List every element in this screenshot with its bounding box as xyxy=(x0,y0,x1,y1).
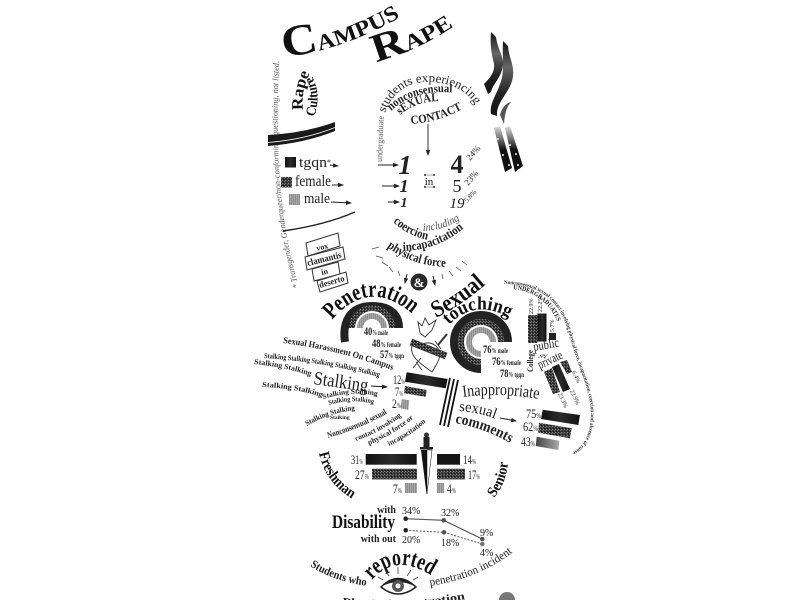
chart: senior bars xyxy=(437,452,480,496)
caption: students who reported penetration incident: reported xyxy=(364,553,438,580)
heading: students experiencing nonconsensual sexual contact: sEXUAL xyxy=(397,93,438,115)
chart: sexual touching rings xyxy=(454,315,508,369)
line chart: disability comparison: 18% xyxy=(441,538,459,549)
chart: stalking bars xyxy=(392,372,448,411)
caption: nonconsensual sexual contact involving physical force or incapacitation xyxy=(326,408,426,446)
chart: college public bars: 22.9% xyxy=(529,298,535,314)
heading: Rape Culture: Culture xyxy=(306,76,318,116)
heading: students experiencing nonconsensual sexual contact: CONTACT xyxy=(411,102,461,124)
banner: vox clamantis in deserto: clamantis xyxy=(306,251,343,269)
title: Campus Rape: RAPE xyxy=(368,16,452,62)
icon: flag streamer xyxy=(484,32,523,172)
heading: Sexual Harassment On Campus: Sexual Harassment On Campus xyxy=(284,337,394,370)
line chart: disability comparison: 34% xyxy=(402,506,420,517)
chart: college private bars: 6.4% xyxy=(570,370,581,384)
chart: college private bars: 22.9% xyxy=(568,389,580,406)
caption: nonconsensual sexual contact involving physical force or incapacitation: Nonconsensual sexual xyxy=(326,408,387,438)
list: coercion, incapacitation, physical force: incapacitation xyxy=(403,224,464,252)
heading: with Disability with out: with out xyxy=(361,534,397,545)
word cloud: Stalking: Stalking Stalking xyxy=(262,382,323,398)
chart: college public bars: 22.2% xyxy=(538,296,544,312)
heading: students experiencing nonconsensual sexual contact xyxy=(380,76,480,124)
banner: vox clamantis in deserto: deserto xyxy=(318,273,346,290)
icon: dagger xyxy=(420,432,433,494)
heading: Inappropriate sexual comments: sexual xyxy=(460,404,498,418)
ratios: 1 in 4, 1 in 5, 1 in 19: 19 xyxy=(450,196,465,212)
heading: Rape Culture: Rape xyxy=(292,71,310,110)
caption: nonconsensual sexual contact involving physical force or incapacitation: contact involving xyxy=(355,413,402,440)
chart: stalking bars: 2% xyxy=(392,396,401,411)
icon: winged heart and sword xyxy=(411,318,447,372)
heading: Inappropriate sexual comments: Inappropriate xyxy=(462,385,540,400)
icon: cut-off grey circle xyxy=(499,592,515,600)
ratios: 1 in 4, 1 in 5, 1 in 19: 24% xyxy=(464,143,483,162)
chart: comments bars xyxy=(521,406,580,450)
chart: freshman bars: 27% xyxy=(355,467,369,482)
stats: sexual touching percentages: 78% tgqn xyxy=(500,366,524,380)
title: Campus Rape xyxy=(284,6,452,62)
legend: respondent groups xyxy=(281,155,351,207)
title: Campus Rape: CAMPUS xyxy=(284,6,398,55)
list: coercion, incapacitation, physical force: physical force xyxy=(386,242,446,267)
caption: students who reported penetration incident: penetration incident xyxy=(430,548,512,588)
line chart: disability comparison: 4% xyxy=(480,548,493,559)
heading: Inappropriate sexual comments: comments xyxy=(456,416,513,442)
legend: respondent groups: * xyxy=(327,158,331,167)
ratios: 1 in 4, 1 in 5, 1 in 19: 1 xyxy=(400,176,408,196)
heading: Sexual touching: Sexual xyxy=(431,272,486,317)
chart: freshman bars xyxy=(351,452,417,496)
chart: college private bars: 23.3% xyxy=(556,392,568,409)
word cloud: Stalking: Stalking Stalking Stalking Stalking Stalking xyxy=(264,353,380,378)
line chart: disability comparison: 32% xyxy=(441,508,459,519)
chart: senior bars: 17% xyxy=(468,467,480,482)
heading: Inappropriate sexual comments xyxy=(456,385,540,442)
word cloud: Stalking: Stalking xyxy=(312,368,370,397)
stats: penetration percentages: 57% tgqn xyxy=(380,347,404,361)
label: College public vs private: private xyxy=(535,347,565,372)
chart: comments bars: 75% xyxy=(526,406,541,421)
triple divider xyxy=(440,378,458,427)
stats: sexual touching percentages xyxy=(483,342,524,380)
label: College public vs private: College xyxy=(525,350,535,372)
chart: comments bars: 62% xyxy=(523,419,538,434)
text arc: nonconsensual definition: Nonconsensual sexual contact involving physical force, incapacitation, coercion and absence of consent xyxy=(504,280,594,454)
word cloud: Stalking xyxy=(254,353,380,426)
heading: with Disability with out xyxy=(332,505,397,545)
legend: respondent groups: female xyxy=(295,173,331,190)
heading: with Disability with out: Disability xyxy=(332,513,396,533)
caption: nonconsensual sexual contact involving physical force or incapacitation: physical force or xyxy=(368,416,413,446)
chart: stalking bars: 12% xyxy=(393,372,405,387)
icon: ampersand badge xyxy=(410,274,428,290)
caption: nonconsensual sexual contact involving physical force or incapacitation: incapacitation xyxy=(387,420,426,446)
list: coercion, incapacitation, physical force xyxy=(386,216,464,267)
word cloud: Stalking: Stalking xyxy=(330,415,350,421)
list: coercion, incapacitation, physical force: including xyxy=(423,216,460,231)
label: undergraduate: undergraduate xyxy=(374,116,386,162)
caption: students who reported penetration incident: Students who xyxy=(310,560,366,586)
arrow: comments to bars xyxy=(500,418,516,421)
chart: freshman bars: 31% xyxy=(351,452,363,467)
chart: penetration rainbow arcs xyxy=(344,306,399,342)
stats: penetration percentages: 48% female xyxy=(372,336,401,350)
label: College public vs private: -vs- xyxy=(537,350,550,361)
stats: penetration percentages: 40% male xyxy=(364,324,388,338)
line chart: disability comparison: 20% xyxy=(402,535,420,546)
footnote: gender definitions along left side: * Transgender, Genderqueer/non-conforming, questioning, not listed. xyxy=(272,62,297,288)
ratios: 1 in 4, 1 in 5, 1 in 19: 4 xyxy=(450,150,464,179)
legend: respondent groups: tgqn xyxy=(299,155,328,171)
banner: vox clamantis in deserto: vox xyxy=(315,241,329,253)
stats: penetration percentages xyxy=(364,324,404,361)
ratios: 1 in 4, 1 in 5, 1 in 19: 1 xyxy=(400,196,408,211)
heading: students experiencing nonconsensual sexual contact: nonconsensual xyxy=(388,84,452,111)
word cloud: Stalking: Stalking Stalking xyxy=(328,396,374,405)
chart: comments bars: 43% xyxy=(521,434,535,449)
line chart: disability comparison xyxy=(402,506,493,559)
sunburst rays xyxy=(372,247,467,279)
label: College public vs private: public xyxy=(532,335,560,354)
heading: Sexual touching: touching xyxy=(444,296,513,324)
lower curved rule xyxy=(283,212,355,231)
chart: senior bars: 14% xyxy=(463,452,476,467)
label: undergraduates: UNDERGRADUATES xyxy=(514,284,561,321)
chart: college public bars: 5.7% xyxy=(550,320,556,332)
heading: Penetration: Penetration xyxy=(320,284,418,320)
heading: with Disability with out: with xyxy=(377,505,396,516)
arrows pointing to categories xyxy=(405,274,435,285)
label: College public vs private xyxy=(525,335,565,372)
chart: senior bars: 4% xyxy=(447,481,456,496)
caption: students who reported penetration incident xyxy=(310,548,512,588)
ratios: 1 in 4, 1 in 5, 1 in 19: 5 xyxy=(452,176,462,196)
chart: college public bars xyxy=(528,296,556,343)
stats: sexual touching percentages: 76% female xyxy=(492,354,521,368)
icon: ampersand badge: & xyxy=(414,275,425,290)
list: coercion, incapacitation, physical force: coercion xyxy=(394,218,428,240)
heading: Senior: Senior xyxy=(488,462,508,498)
banner: vox clamantis in deserto: in xyxy=(320,266,329,277)
arrow: down to ratios xyxy=(427,124,429,155)
ratios: 1 in 4, 1 in 5, 1 in 19: in xyxy=(425,176,434,188)
heading: Rape Culture xyxy=(292,71,318,116)
heading: Freshman: Freshman xyxy=(319,450,354,498)
ratios: 1 in 4, 1 in 5, 1 in 19 xyxy=(378,143,483,212)
ratios: 1 in 4, 1 in 5, 1 in 19: 5.8% xyxy=(463,188,478,204)
heading: Sexual touching xyxy=(431,272,513,324)
ratios: 1 in 4, 1 in 5, 1 in 19: 23% xyxy=(462,168,481,187)
word cloud: Stalking: Stalking Stalking xyxy=(305,406,355,426)
icon: eye xyxy=(378,567,418,594)
banner: vox clamantis in deserto xyxy=(305,233,348,292)
arrow: stalking to bars xyxy=(371,386,387,387)
stats: sexual touching percentages: 76% male xyxy=(483,342,508,356)
chart: stalking bars: 7% xyxy=(395,384,403,399)
word cloud: Stalking: Stalking Stalking xyxy=(254,359,312,377)
line chart: disability comparison: 9% xyxy=(480,528,493,539)
chart: college private bars xyxy=(544,360,581,409)
heading: students experiencing nonconsensual sexual contact: students experiencing xyxy=(380,76,480,112)
ratios: 1 in 4, 1 in 5, 1 in 19: 1 xyxy=(398,150,412,180)
legend: respondent groups: male xyxy=(304,191,330,207)
decorative swoosh band xyxy=(268,122,335,146)
chart: freshman bars: 7% xyxy=(393,481,402,496)
word cloud: Stalking: Stalking Stalking xyxy=(322,388,378,399)
